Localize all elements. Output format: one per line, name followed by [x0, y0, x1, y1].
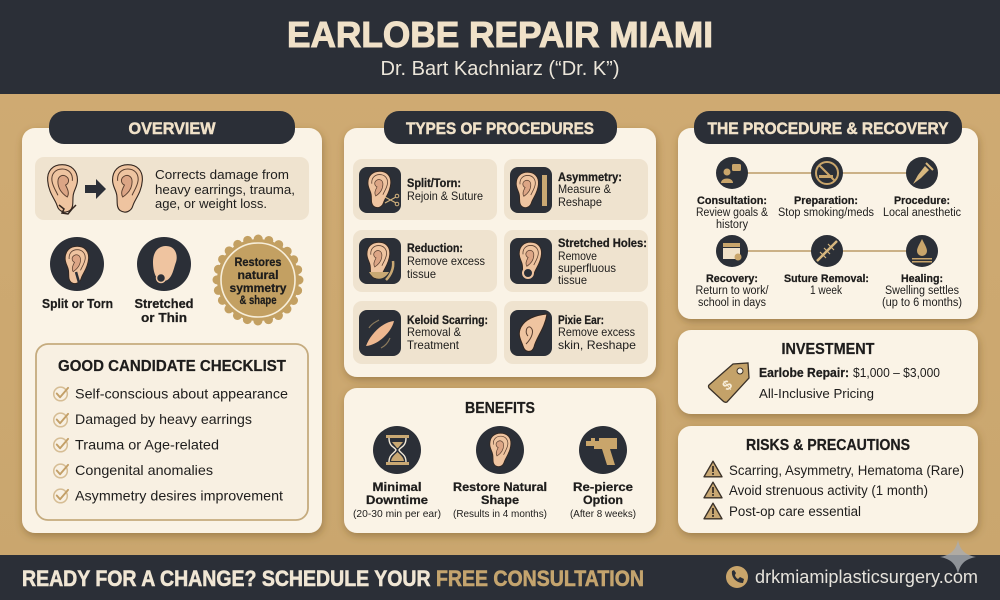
step: procedure — [883, 157, 961, 219]
benefit: restore natural shape: Restore Natural — [453, 480, 547, 494]
tile: asymmetry: Reshape — [558, 195, 602, 209]
benefit: minimal downtime: Minimal — [372, 480, 422, 494]
step: healing: Swelling settles — [885, 285, 959, 297]
checklist item: Asymmetry desires improvement — [75, 488, 283, 504]
tile: pixie ear: Pixie Ear: — [558, 315, 604, 327]
panel: risks and precautions — [678, 426, 978, 533]
tile: pixie ear: skin, Reshape — [558, 338, 636, 352]
subtitle: Dr. Bart Kachniarz (“Dr. K”) — [380, 58, 620, 80]
heading pill: procedure: THE PROCEDURE & RECOVERY — [708, 119, 949, 138]
risk item: Avoid strenuous activity (1 month) — [729, 483, 928, 498]
type: stretched or thin: or Thin — [141, 310, 187, 325]
tile: asymmetry: Measure & — [558, 182, 611, 196]
icon: arrow — [85, 179, 106, 199]
footer band — [0, 540, 1000, 600]
tile: stretched holes: tissue — [558, 273, 587, 287]
step: preparation: Stop smoking/meds — [778, 207, 874, 219]
benefit: minimal downtime — [353, 426, 441, 520]
type: split or torn — [42, 237, 113, 311]
benefit: re-pierce option: Re-pierce — [573, 480, 633, 494]
type: stretched or thin: Stretched — [134, 296, 194, 311]
benefit: re-pierce option: (After 8 weeks) — [570, 508, 636, 520]
heading pill: overview: OVERVIEW — [128, 119, 216, 138]
step: suture removal — [784, 235, 869, 297]
benefit: restore natural shape: Shape — [481, 493, 519, 507]
benefit: re-pierce option: Option — [583, 493, 623, 507]
heading pill: types — [384, 111, 617, 144]
seal: restores natural symmetry: natural — [238, 268, 278, 282]
tile: asymmetry: Asymmetry: — [558, 172, 622, 184]
tile: reduction: Reduction: — [407, 243, 463, 255]
tile: pixie ear — [504, 301, 648, 364]
step: recovery: Return to work/ — [696, 285, 769, 297]
icon: torn ear — [48, 165, 77, 214]
heading: benefits: BENEFITS — [465, 400, 535, 417]
tile: split/torn — [353, 159, 497, 220]
header band — [0, 0, 1000, 94]
seal: restores natural symmetry — [217, 239, 299, 321]
pricing text: All-Inclusive Pricing — [759, 387, 874, 401]
tile: reduction: Remove excess — [407, 254, 485, 268]
icon: price tag — [708, 363, 749, 402]
benefit: restore natural shape — [453, 426, 547, 520]
heading pill: types: TYPES OF PROCEDURES — [406, 119, 594, 138]
icon: repaired ear — [113, 165, 142, 212]
step: suture removal: 1 week — [810, 285, 842, 297]
checklist item: Self-conscious about appearance — [75, 386, 288, 402]
benefit: minimal downtime: Downtime — [366, 493, 428, 507]
intro text: heavy earrings, trauma, — [155, 182, 295, 197]
icon: phone — [726, 566, 748, 588]
tile: stretched holes: Remove — [558, 249, 597, 263]
icon: price tag: $ — [719, 376, 735, 394]
step: healing — [882, 235, 962, 309]
type: split or torn: Split or Torn — [42, 296, 113, 311]
intro text — [155, 167, 295, 211]
seal: restores natural symmetry: & shape — [240, 293, 277, 307]
step: preparation: Preparation: — [794, 195, 858, 207]
type: stretched or thin — [134, 237, 194, 325]
risk item: Scarring, Asymmetry, Hematoma (Rare) — [729, 463, 964, 478]
tile: stretched holes: superfluous — [558, 261, 616, 275]
seal: restores natural symmetry: Restores — [234, 255, 282, 269]
panel: types of procedures — [344, 111, 656, 377]
seal: restores natural symmetry: symmetry — [230, 281, 287, 295]
step: suture removal: Suture Removal: — [784, 273, 869, 285]
tile: split/torn: Rejoin & Suture — [407, 189, 483, 203]
tile: keloid scarring — [353, 301, 497, 364]
intro strip — [35, 157, 309, 220]
step: consultation: history — [716, 219, 748, 231]
tile: stretched holes: Stretched Holes: — [558, 238, 647, 250]
tile: asymmetry — [504, 159, 648, 220]
pricing text — [759, 366, 940, 401]
checklist item: Damaged by heavy earrings — [75, 411, 252, 427]
step: consultation — [696, 157, 768, 231]
tile: stretched holes — [504, 230, 648, 292]
checklist item: Congenital anomalies — [75, 462, 213, 478]
tile: reduction: tissue — [407, 267, 436, 281]
call to action: READY FOR A CHANGE? SCHEDULE YOUR FREE CONSULTATION — [22, 566, 644, 591]
heading pill: procedure — [694, 111, 962, 144]
pricing text: Earlobe Repair: — [759, 366, 849, 380]
panel: procedure and recovery — [678, 111, 978, 319]
panel: benefits — [344, 388, 656, 533]
step: healing: (up to 6 months) — [882, 297, 962, 309]
website: drkmiamiplasticsurgery.com — [755, 566, 978, 587]
sparkle — [940, 540, 976, 574]
tile: split/torn: Split/Torn: — [407, 178, 461, 190]
heading: investment: INVESTMENT — [782, 341, 875, 358]
intro text: age, or weight loss. — [155, 196, 267, 211]
tile: keloid scarring: Keloid Scarring: — [407, 315, 488, 327]
pricing text: $1,000 – $3,000 — [853, 366, 940, 380]
step: preparation — [778, 157, 874, 219]
panel: overview — [22, 111, 322, 533]
step: recovery: school in days — [698, 297, 766, 309]
step: consultation: Review goals & — [696, 207, 768, 219]
checklist item: Trauma or Age-related — [75, 436, 219, 452]
tile: keloid scarring: Removal & — [407, 325, 461, 339]
tile: reduction — [353, 230, 497, 292]
risk item: Post-op care essential — [729, 504, 861, 519]
checklist heading: GOOD CANDIDATE CHECKLIST — [58, 358, 286, 375]
step: recovery: Recovery: — [706, 273, 758, 285]
benefit: minimal downtime: (20-30 min per ear) — [353, 508, 441, 520]
heading pill: overview — [49, 111, 295, 144]
benefit: restore natural shape: (Results in 4 months) — [453, 508, 547, 520]
benefit: re-pierce option — [570, 426, 636, 520]
checklist box — [36, 344, 308, 520]
step: recovery — [696, 235, 769, 309]
heading: risks: RISKS & PRECAUTIONS — [746, 437, 910, 454]
tile: pixie ear: Remove excess — [558, 325, 635, 339]
step: procedure: Local anesthetic — [883, 207, 961, 219]
panel: investment — [678, 330, 978, 414]
step: healing: Healing: — [901, 273, 943, 285]
intro text: Corrects damage from — [155, 167, 289, 182]
title: EARLOBE REPAIR MIAMI — [287, 14, 713, 55]
tile: keloid scarring: Treatment — [407, 338, 460, 352]
step: consultation: Consultation: — [697, 195, 767, 207]
step: procedure: Procedure: — [894, 195, 950, 207]
